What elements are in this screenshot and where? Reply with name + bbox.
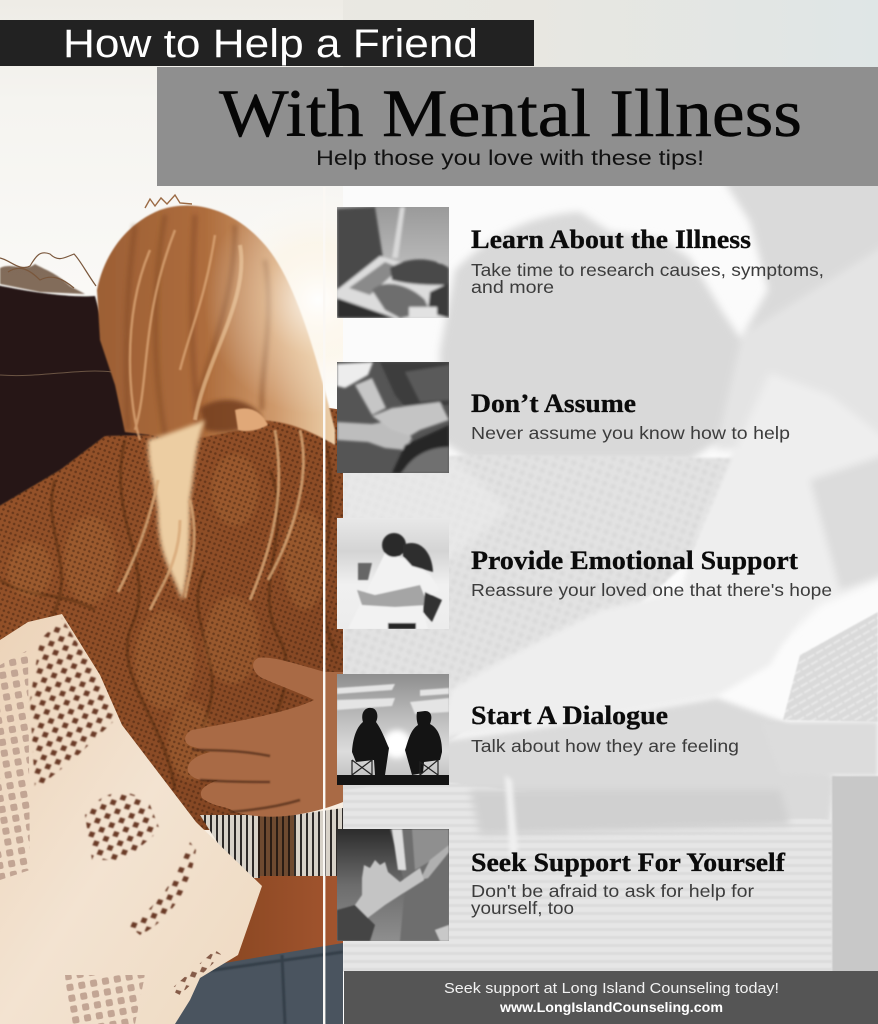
man head and collar <box>724 186 878 332</box>
shirt sleeve <box>738 385 878 624</box>
tip 3 text: Provide Emotional Support <box>471 546 798 575</box>
tip 1 text: Take time to research causes, symptoms, <box>471 260 824 280</box>
tip 2 text: Never assume you know how to help <box>471 423 790 443</box>
tip 1 text: and more <box>471 277 554 297</box>
tip 4 text: Start A Dialogue <box>471 701 668 730</box>
tip 5 text <box>471 848 785 918</box>
lower right <box>832 776 878 976</box>
vertical white line <box>323 187 325 1024</box>
mid body <box>330 698 835 830</box>
top black title bar <box>0 20 534 66</box>
sweater <box>0 395 343 835</box>
footer bar: www.LongIslandCounseling.com <box>499 1000 723 1015</box>
jeans <box>168 943 343 1024</box>
subtitle: Help those you love with these tips! <box>316 146 704 170</box>
cuff knit <box>783 612 878 722</box>
lower knit <box>343 780 832 972</box>
thumbnail: joined hands <box>337 362 449 473</box>
jacket <box>715 235 878 450</box>
tip 3 text: Reassure your loved one that there's hope <box>471 580 832 600</box>
washed tones <box>440 170 878 640</box>
tip 1 text: Learn About the Illness <box>471 225 751 254</box>
blonde hair <box>97 195 335 610</box>
tip 3 text <box>471 546 832 600</box>
curly hair <box>440 212 745 460</box>
title line one: How to Help a Friend <box>63 22 478 66</box>
tip 1 text <box>471 225 824 297</box>
footer bar <box>344 971 878 1024</box>
striped sleeve <box>200 808 343 878</box>
top background <box>0 0 878 200</box>
footer bar: Seek support at Long Island Counseling today! <box>444 981 779 997</box>
thumbnail: reaching hands <box>337 829 449 941</box>
thumbnail: two people at sunset <box>337 674 449 785</box>
tip 5 text: Seek Support For Yourself <box>471 848 785 877</box>
thumbnail: two people hugging <box>337 518 449 629</box>
hand on back <box>185 657 343 817</box>
lace cardigan <box>0 610 270 1024</box>
tip 5 text: yourself, too <box>471 898 574 918</box>
sunlight glow <box>210 226 343 402</box>
tip 2 text: Don’t Assume <box>471 389 636 418</box>
dark curly hair <box>0 253 150 508</box>
sleeve and arm <box>449 462 782 736</box>
tip 4 text: Talk about how they are feeling <box>471 736 739 756</box>
left photo: embracing friends <box>0 0 343 1024</box>
title line two: With Mental Illness <box>219 75 802 151</box>
forearm <box>224 876 343 963</box>
tip 5 text: Don't be afraid to ask for help for <box>471 881 754 901</box>
tip 4 text <box>471 701 739 756</box>
tip 2 text <box>471 389 790 443</box>
knit sweater <box>343 455 731 740</box>
gray header panel <box>157 67 878 186</box>
thumbnail: laptop typing <box>337 207 449 318</box>
right washed photo <box>330 170 878 976</box>
